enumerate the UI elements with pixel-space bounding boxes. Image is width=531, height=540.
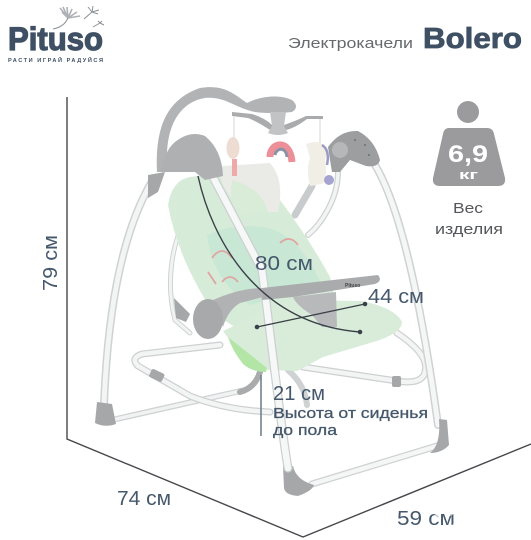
label: 80 cm: 80 см (255, 253, 313, 275)
swing: control panel (328, 131, 380, 172)
swing: left dome (161, 134, 223, 180)
swing: base and rear legs (104, 165, 438, 484)
swing: seat back fabric (168, 172, 335, 330)
dimension curve: 80 cm (198, 176, 362, 334)
toy: hanging teardrop (226, 137, 240, 176)
label: 79 cm: 79 см (40, 235, 62, 291)
swing: mobile arm and hub (232, 112, 323, 148)
swing: tray and armrest (213, 275, 380, 327)
swing product illustration (95, 87, 449, 496)
weight badge: изделия (435, 221, 503, 238)
weight badge: 6,9 (448, 141, 488, 168)
label: 74 cm: 74 см (117, 488, 171, 510)
title: product type: Электрокачели (288, 36, 413, 52)
weight badge (433, 101, 505, 238)
weight badge: Вес (453, 200, 484, 217)
swing: seat bottom (223, 300, 402, 371)
dimension line: 21 cm (260, 375, 262, 436)
icon: weight (433, 101, 505, 186)
swing: side hub (193, 299, 223, 339)
label: 21 cm and seat height: до пола (273, 422, 338, 439)
dimension line: 44 cm (255, 302, 367, 329)
weight badge: кг (459, 167, 479, 182)
watermark: Avito: Avito (466, 512, 515, 534)
title: product name: Bolero (423, 23, 522, 55)
swing: mobile arch (157, 87, 296, 172)
logo: Pituso: Pituso (8, 21, 103, 57)
logo: Pituso: РАСТИ ИГРАЙ РАДУЙСЯ (8, 56, 103, 64)
swing: front leg (213, 177, 288, 468)
watermark: Avito (433, 504, 515, 534)
swing: storage net (228, 337, 267, 372)
swing: rainbow fabric print (208, 239, 298, 284)
label: 44 cm: 44 см (368, 286, 424, 308)
toy: rainbow (270, 145, 292, 162)
label: 21 cm and seat height: 21 см (273, 383, 325, 405)
label: 59 cm: 59 см (397, 508, 455, 530)
swing: feet and clamps (95, 172, 449, 496)
label: 21 cm and seat height (273, 383, 428, 439)
logo: Pituso (8, 6, 104, 64)
label: 21 cm and seat height: Высота от сиденья (273, 405, 428, 422)
toy: unicorn (306, 142, 334, 186)
swing: tray and armrest: Pituso (345, 283, 360, 289)
dimension frame lines (67, 97, 531, 537)
